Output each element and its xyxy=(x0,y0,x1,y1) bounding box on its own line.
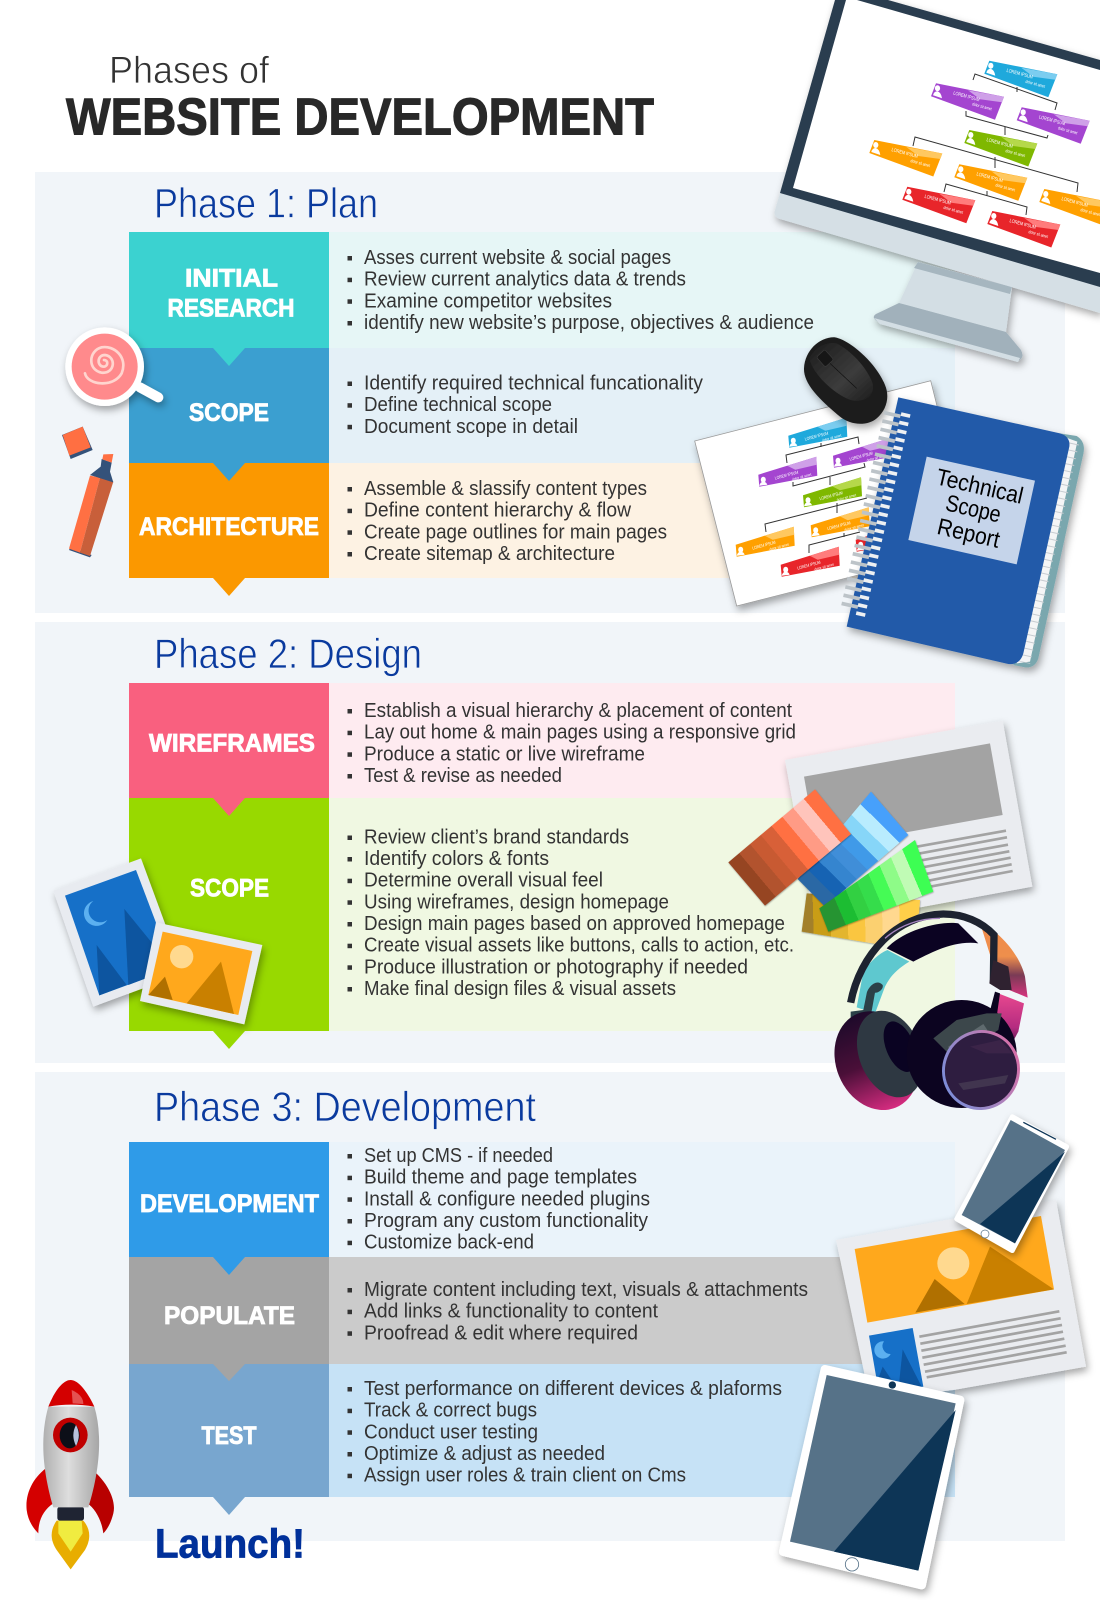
panel background xyxy=(35,622,1065,1063)
icon: mountain photo xyxy=(140,922,262,1024)
label: scope design: SCOPE xyxy=(190,874,269,902)
icon: phone xyxy=(957,1117,1067,1251)
icon: spiral magnifier xyxy=(65,327,158,406)
bullet list: development: Program any custom functionality xyxy=(364,1210,648,1232)
bullet list: development: Install & configure needed plugins xyxy=(364,1188,650,1210)
icon: technical scope report notebook xyxy=(847,397,1084,667)
bullet list: scope design: Produce illustration or photography if needed xyxy=(364,956,748,978)
bullet list: test: Track & correct bugs xyxy=(364,1400,537,1422)
bullet list: populate: Add links & functionality to content xyxy=(364,1301,658,1323)
row: scope design xyxy=(129,798,955,1049)
panel: phase 2 design xyxy=(35,622,1065,1063)
title line: Phases of: Phases of xyxy=(109,50,269,92)
icon: printed sitemap paper xyxy=(695,381,972,606)
bullet list: scope: Identify required technical funcationality xyxy=(364,372,703,394)
sitemap cards on monitor xyxy=(869,61,1100,248)
icon: colour swatches xyxy=(728,789,933,944)
label: scope: SCOPE xyxy=(189,399,269,427)
notebook label: Report xyxy=(935,513,1003,553)
heading: Phase 3: Phase 3: Development xyxy=(154,1083,536,1130)
bullet list: initial research: Review current analytics data & trends xyxy=(364,269,686,291)
notebook label xyxy=(908,457,1035,564)
left ear cup xyxy=(820,998,933,1123)
bullet list: scope xyxy=(348,372,703,438)
bullet list: development: Build theme and page templates xyxy=(364,1167,637,1189)
row: architecture xyxy=(129,463,955,596)
bullet list: scope design: Make final design files & visual assets xyxy=(364,978,676,1000)
label: architecture: ARCHITECTURE xyxy=(139,513,319,541)
icon: mouse xyxy=(804,337,887,424)
heading: Phase 2: Phase 2: Design xyxy=(154,630,422,677)
bullet list: scope design: Create visual assets like buttons, calls to action, etc. xyxy=(364,935,794,957)
bullet list: architecture: Create sitemap & architecture xyxy=(364,543,615,565)
bullet list: populate xyxy=(348,1279,808,1344)
heading: Phase 1: Phase 1: Plan xyxy=(154,180,378,226)
bullet list: wireframes: Establish a visual hierarchy & placement of content xyxy=(364,700,792,722)
bullet list: initial research: identify new website’s purpose, objectives & audience xyxy=(364,312,814,334)
icon: headphones xyxy=(820,914,1029,1123)
label: populate: POPULATE xyxy=(164,1302,295,1330)
title xyxy=(66,50,654,146)
bullet list: test xyxy=(348,1378,782,1487)
label: wireframes: WIREFRAMES xyxy=(149,730,315,758)
bullet list: scope design: Determine overall visual feel xyxy=(364,870,603,892)
row: wireframes xyxy=(129,683,955,798)
bullet list: scope design xyxy=(348,826,794,1000)
row: initial research: RESEARCH xyxy=(168,294,294,322)
right headband section xyxy=(980,923,1028,998)
row: development xyxy=(129,1142,955,1257)
icon: night photo xyxy=(53,858,183,1007)
label: development: DEVELOPMENT xyxy=(140,1190,319,1218)
panel: phase 1 plan xyxy=(35,172,1065,613)
row: scope xyxy=(129,348,955,463)
bullet list: development: Customize back-end xyxy=(364,1232,534,1254)
panel background xyxy=(35,1072,1065,1541)
bullet list: wireframes xyxy=(348,700,796,787)
sitemap cards on paper xyxy=(736,418,915,577)
bullet list: development xyxy=(348,1145,650,1254)
left headband section xyxy=(857,950,909,1013)
icon: tablet xyxy=(783,1369,960,1585)
bullet list: architecture: Define content hierarchy & flow xyxy=(364,500,632,522)
bullet list: initial research xyxy=(348,247,814,334)
title line: Website Development: WEBSITE DEVELOPMENT xyxy=(66,88,654,146)
row: initial research xyxy=(129,232,955,348)
bullet list: test: Optimize & adjust as needed xyxy=(364,1443,605,1465)
row: test xyxy=(129,1364,955,1515)
bullet list: test: Assign user roles & train client on Cms xyxy=(364,1465,686,1487)
bullet list: scope design: Design main pages based on approved homepage xyxy=(364,913,785,935)
bullet list: scope: Define technical scope xyxy=(364,394,552,416)
bullet list: wireframes: Lay out home & main pages using a responsive grid xyxy=(364,722,796,744)
notebook label: Scope xyxy=(943,490,1004,527)
notebook label: Technical xyxy=(934,464,1026,509)
bullet list: architecture xyxy=(348,478,667,565)
bullet list: wireframes: Test & revise as needed xyxy=(364,765,562,787)
bullet list: scope design: Review client’s brand standards xyxy=(364,826,629,848)
bullet list: populate: Proofread & edit where required xyxy=(364,1322,638,1344)
bullet list: populate: Migrate content including text, visuals & attachments xyxy=(364,1279,808,1301)
icon: layout document xyxy=(836,1200,1086,1400)
label: test: TEST xyxy=(202,1422,256,1450)
bullet list: initial research: Examine competitor websites xyxy=(364,290,612,312)
bullet list: architecture: Assemble & slassify content types xyxy=(364,478,647,500)
bullet list: scope: Document scope in detail xyxy=(364,416,578,438)
bullet list: development: Set up CMS - if needed xyxy=(364,1145,553,1167)
icon: highlighter marker xyxy=(69,454,113,557)
right ear cup xyxy=(907,1000,1017,1108)
bullet list: scope design: Identify colors & fonts xyxy=(364,848,549,870)
launch heading: Launch! xyxy=(155,1520,305,1566)
icon: eraser xyxy=(62,427,93,459)
icon: wireframe layout paper xyxy=(785,721,1032,927)
icon: rocket xyxy=(26,1380,114,1569)
panel background xyxy=(35,172,1065,613)
bullet list: scope design: Using wireframes, design homepage xyxy=(364,891,669,913)
panel: phase 3 development xyxy=(35,1072,1065,1541)
spiral binding xyxy=(848,413,906,617)
bullet list: test: Test performance on different devices & plaforms xyxy=(364,1378,782,1400)
row: populate xyxy=(129,1257,955,1364)
bullet list: initial research: Asses current website & social pages xyxy=(364,247,671,269)
label: initial research: INITIAL xyxy=(185,264,278,292)
icon: monitor with sitemap xyxy=(775,0,1100,362)
bullet list: architecture: Create page outlines for main pages xyxy=(364,521,667,543)
bullet list: wireframes: Produce a static or live wireframe xyxy=(364,743,645,765)
bullet list: test: Conduct user testing xyxy=(364,1421,538,1443)
